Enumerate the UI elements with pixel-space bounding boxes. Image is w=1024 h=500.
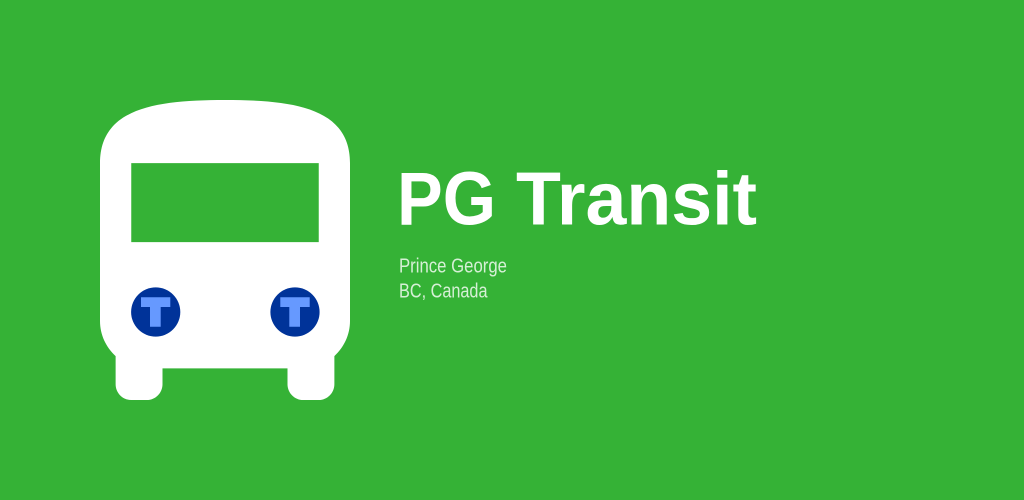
icon: right headlight transit logo <box>270 287 320 337</box>
icon: left headlight transit logo <box>131 287 180 337</box>
subtitle: region: BC, Canada <box>399 280 488 302</box>
title: PG <box>397 156 496 240</box>
title: Transit <box>516 156 757 240</box>
bus body with window <box>100 100 350 400</box>
subtitle: city: Prince George <box>399 256 507 278</box>
icon: bus front <box>100 100 350 400</box>
